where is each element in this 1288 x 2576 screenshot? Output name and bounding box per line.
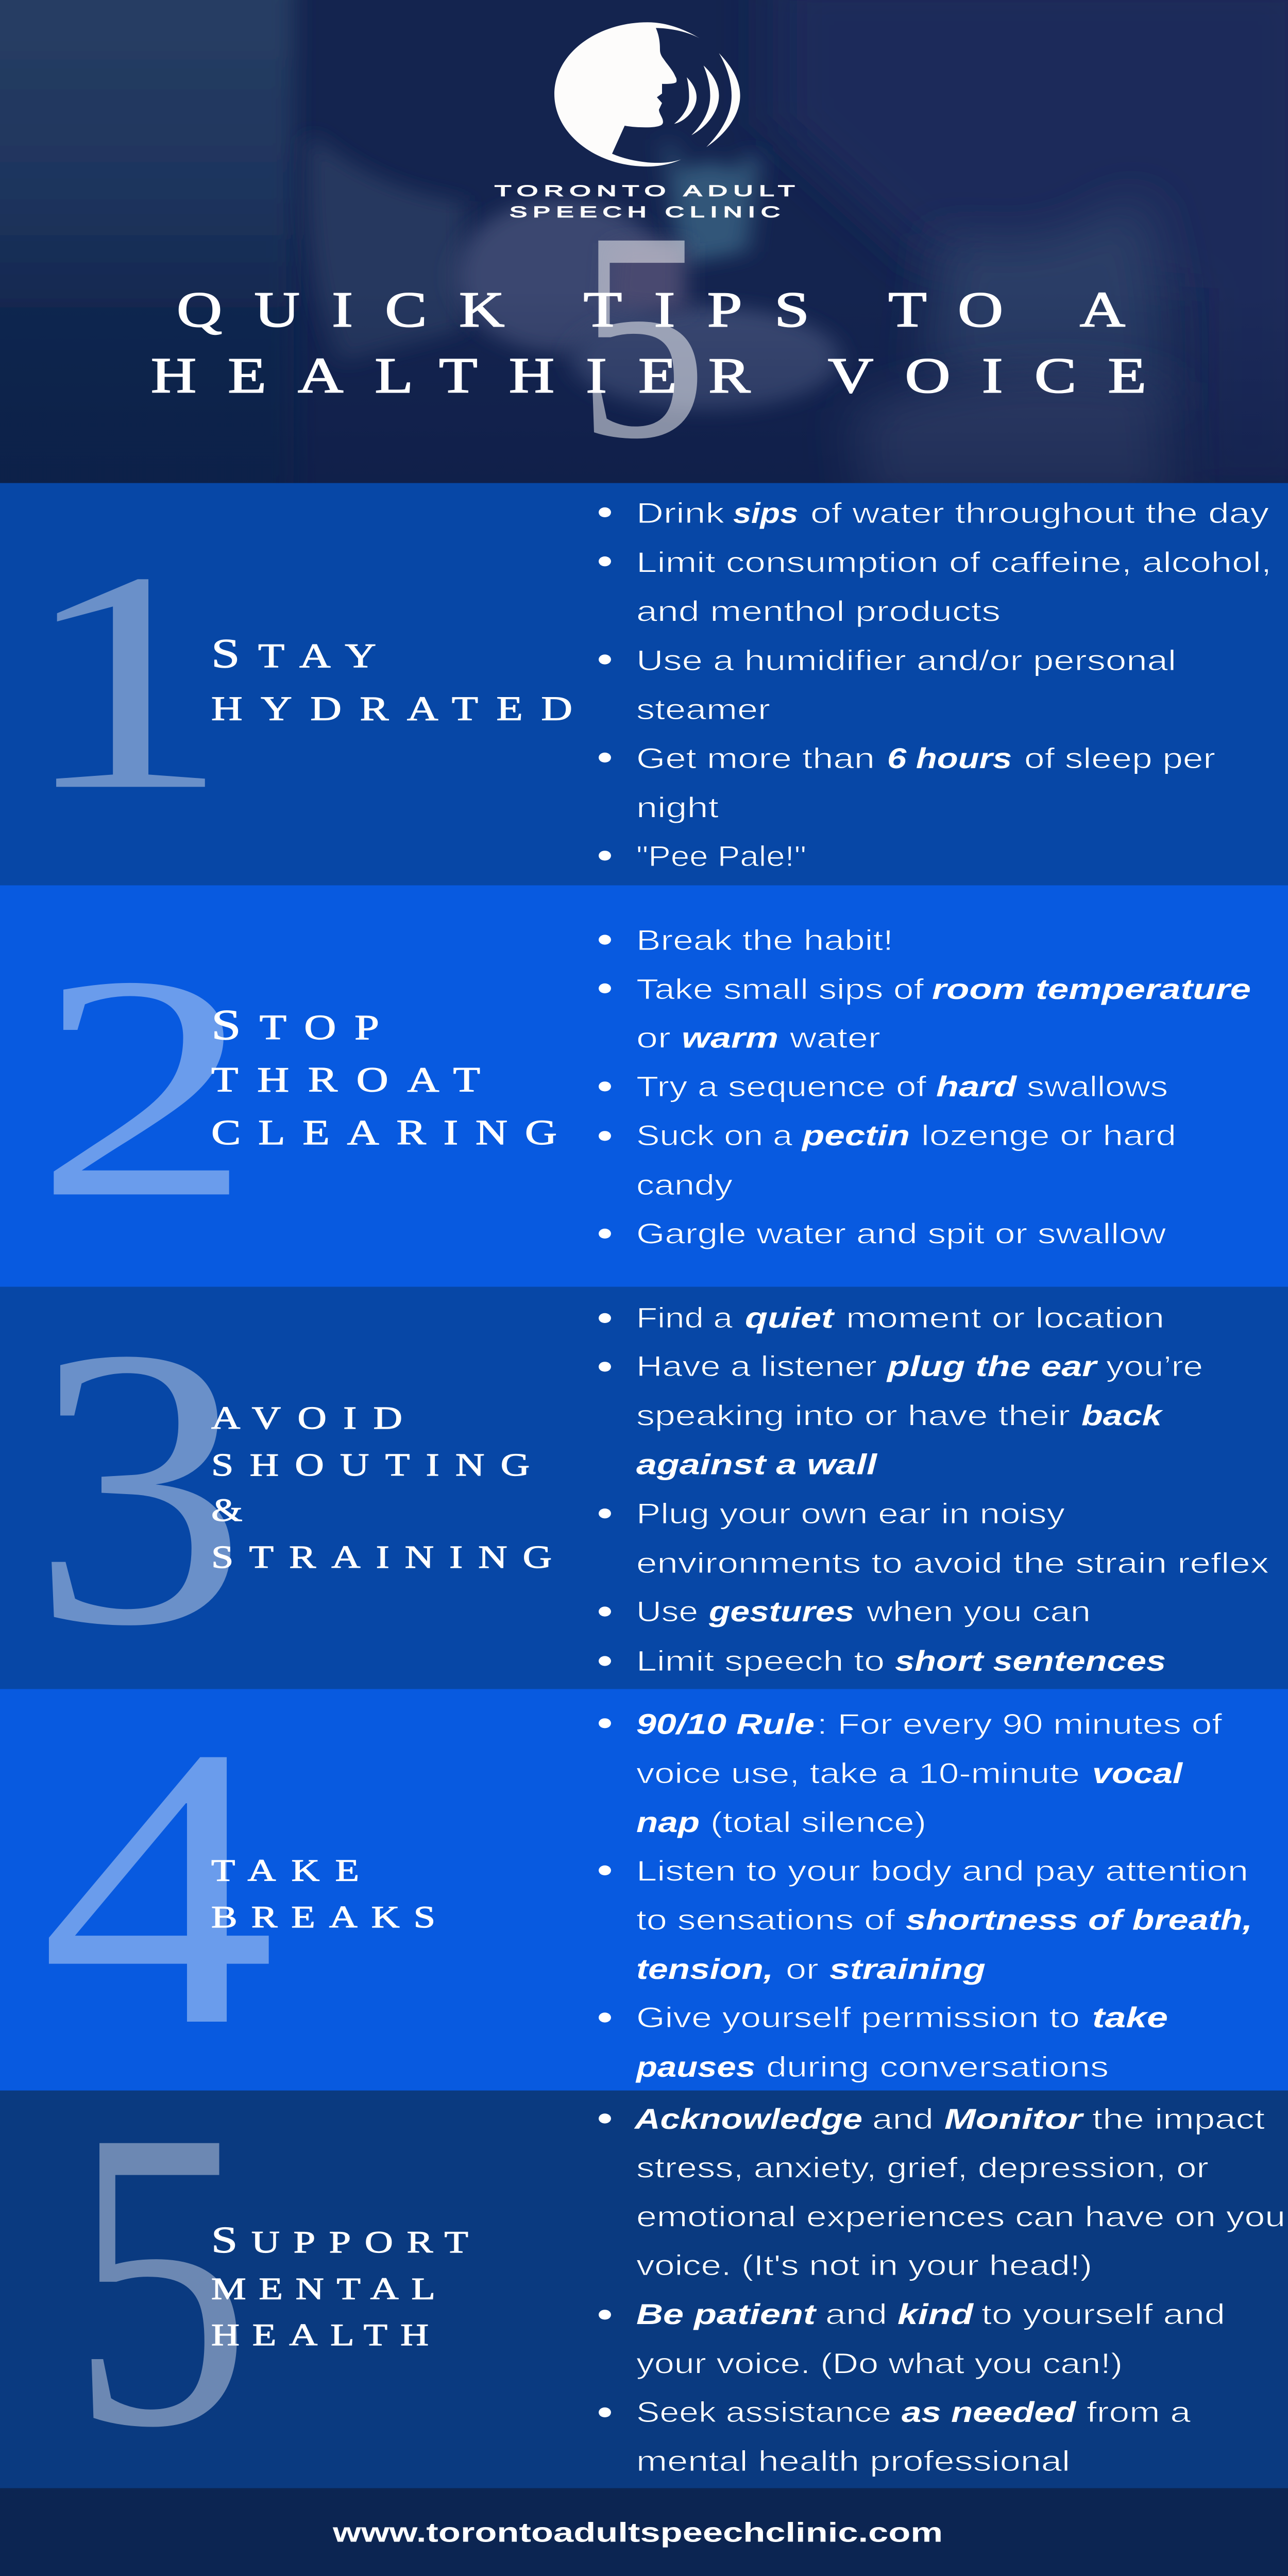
bullet: quiet moment [599,1302,1164,1334]
title: HEALTHIER VOICE [151,348,1146,403]
heading: stay hydrated [211,631,572,728]
footer band [0,2488,1288,2576]
bullet: sleep: night [636,792,719,824]
panel: tip 4 take breaks [0,1664,1288,2109]
bullet: 90/10 rule: vocal [1092,1757,1183,1789]
bullet: gargle: Gargle water and spit or swallow [636,1218,1166,1250]
bullet: listen to your body: tension, [636,1953,773,1985]
bullet: break the habit: Break the habit! [636,925,893,956]
bullet: small sips: water [789,1022,880,1054]
bullet: limit consumption [599,547,1272,628]
bullet: be patient and kind: to yourself and [981,2299,1225,2331]
bullet: pee pale: "Pee Pale!" [636,840,806,872]
bullet: acknowledge and monitor: emotional experiences can have on you [636,2201,1285,2233]
bullet: hard swallows: Try a sequence of [636,1071,927,1103]
heading: stop throat clearing: THROAT [211,1060,480,1099]
panel: tip 5 support mental health [0,2042,1288,2515]
bullet: be patient and kind: Be patient [636,2299,817,2331]
bullet: listen to your body [599,1855,1252,1985]
bullet: be patient and kind [599,2299,1225,2380]
panel: tip 2 stop throat clearing [0,885,1288,1287]
heading: take breaks: TAKE [211,1853,359,1888]
bullet: plug the ear: back [1081,1400,1164,1432]
heading: stay hydrated: HYDRATED [211,689,572,728]
bullet: hard swallows [599,1071,1168,1103]
numeral 3: 3 [31,1265,247,1708]
bullet: permission to pause: pauses [635,2052,755,2083]
bullet: limit consumption: Limit consumption of caffeine, alcohol, [636,547,1272,579]
bullet: seek assistance: as needed [902,2396,1077,2428]
bullet: acknowledge and monitor: the impact [1092,2104,1265,2135]
numeral: header five: 5 [578,171,707,500]
bullet: permission to pause: during conversations [766,2052,1109,2083]
bullet: drink sips: sips [733,498,798,530]
footer website url: www.torontoadultspeechclinic.com [332,2517,943,2548]
bullet: listen to your body: Listen to your body and pay attention [636,1855,1248,1887]
logo wordmark [495,183,801,221]
bullet: small sips: Take small sips of [636,974,924,1006]
bullet: hard swallows: swallows [1027,1071,1168,1103]
bullet: gestures [599,1596,1091,1628]
title: QUICK TIPS TO A [177,282,1125,337]
bullet: plug the ear: against a wall [636,1449,878,1481]
bullet: limit consumption: and menthol products [636,596,1001,628]
heading: avoid shouting and straining [211,1400,552,1575]
bullet: small sips: room temperature [932,974,1251,1006]
bullet: short sentences [599,1646,1166,1677]
bullet: small sips: or [636,1022,671,1054]
bullet: permission to pause: take [1092,2002,1168,2034]
bullet: acknowledge and monitor: and [872,2104,934,2135]
bullet: 90/10 rule: (total silence) [710,1807,926,1838]
heading: support mental health: HEALTH [211,2317,429,2352]
panel: header photo background [0,0,1288,536]
bullet: pectin lozenge: candy [636,1170,733,1201]
heading: support mental health: S UPPORT [211,2219,468,2261]
bullet: plug your own ear: Plug your own ear in noisy [636,1498,1065,1530]
bullet: small sips [599,974,1251,1054]
bullet: gestures: when you can [866,1596,1091,1628]
heading: stay hydrated: S TAY [211,631,376,676]
bullet: acknowledge and monitor: stress, anxiety, grief, depression, or [636,2152,1209,2184]
logo wordmark: SPEECH CLINIC [510,204,786,221]
bullet: listen to your body: straining [829,1953,986,1985]
bullet: gestures: gestures [708,1596,854,1628]
bullet: acknowledge and monitor [599,2104,1285,2281]
bullet: pectin lozenge: pectin [801,1120,910,1152]
heading: support mental health [211,2219,468,2352]
numeral 5: 5 [71,2042,251,2515]
bullet: plug your own ear: environments to avoid the strain reflex [636,1547,1269,1579]
bullet: quiet moment: moment or location [846,1302,1164,1334]
bullet: plug the ear: plug the ear [886,1351,1098,1383]
icon: clinic logo head with sound waves [554,22,740,166]
bullet: sleep: of sleep per [1024,743,1215,775]
bullet: seek assistance: from a [1087,2396,1191,2428]
heading: take breaks [211,1853,435,1934]
bullet: acknowledge and monitor: voice. (It's not in your head!) [636,2250,1092,2281]
heading: avoid shouting and straining: AVOID [211,1400,402,1436]
numeral 1: 1 [19,507,230,855]
panel: tip 3 avoid shouting and straining [0,1265,1288,1708]
bullet: quiet moment: Find a [636,1302,733,1334]
heading: avoid shouting and straining: & [211,1493,243,1528]
bullet: drink sips: Drink [636,498,725,530]
bullet: 90/10 rule [599,1708,1223,1838]
bullet: pectin lozenge: Suck on a [636,1120,792,1152]
bullet: seek assistance [599,2396,1191,2477]
heading: stop throat clearing: CLEARING [211,1113,557,1152]
bullet: listen to your body: to sensations of [636,1904,895,1936]
bullet: plug your own ear [599,1498,1269,1579]
bullet: sleep: 6 hours [887,743,1012,775]
heading: avoid shouting and straining: STRAINING [211,1539,552,1575]
bullet: plug the ear: speaking into or have their [636,1400,1070,1432]
bullet: acknowledge and monitor: Acknowledge [634,2104,862,2135]
bullet: permission to pause [599,2002,1168,2083]
bullet: plug the ear: Have a listener [636,1351,877,1383]
bullet: plug the ear: you’re [1106,1351,1203,1383]
heading: stop throat clearing [211,1001,557,1152]
heading: stop throat clearing: S TOP [211,1001,379,1048]
bullet: drink sips [599,498,1269,530]
numeral 4: 4 [40,1664,276,2109]
title [151,282,1146,403]
heading: take breaks: BREAKS [211,1900,435,1934]
bullet: sleep: Get more than [636,743,875,775]
bullet: sleep [599,743,1215,824]
bullet: 90/10 rule: nap [636,1807,700,1838]
numeral 2: 2 [35,910,253,1264]
bullet: short sentences: Limit speech to [636,1646,885,1677]
bullet: listen to your body: shortness of breath, [906,1904,1252,1936]
bullet: drink sips: of water throughout the day [810,498,1269,530]
bullet: small sips: warm [682,1022,778,1054]
bullet: pectin lozenge: lozenge or hard [921,1120,1176,1152]
bullet: be patient and kind: and [825,2299,887,2331]
bullet: humidifier [599,645,1176,725]
bullet: 90/10 rule: voice use, take a 10-minute [636,1757,1080,1789]
bullet: gestures: Use [636,1596,698,1628]
bullet: listen to your body: or [786,1953,819,1985]
bullet: 90/10 rule: 90/10 Rule [636,1708,815,1740]
bullet: be patient and kind: your voice. (Do what you can!) [636,2348,1123,2380]
bullet: seek assistance: Seek assistance [636,2396,891,2428]
bullet: hard swallows: hard [936,1071,1018,1103]
bullet: acknowledge and monitor: Monitor [944,2104,1084,2135]
bullet: seek assistance: mental health professional [636,2446,1070,2477]
bullet: be patient and kind: kind [897,2299,974,2331]
bullet: 90/10 rule: : For every 90 minutes of [817,1708,1223,1740]
bullet: plug the ear [599,1351,1203,1481]
bullet: permission to pause: Give yourself permission to [636,2002,1080,2034]
bullet: quiet moment: quiet [745,1302,835,1334]
bullet: pectin lozenge [599,1120,1176,1201]
heading: avoid shouting and straining: SHOUTING [211,1447,530,1483]
bullet: humidifier: Use a humidifier and/or personal [636,645,1176,676]
bullet: short sentences: short sentences [895,1646,1166,1677]
heading: support mental health: MENTAL [211,2272,435,2306]
panel: tip 1 stay hydrated [0,483,1288,886]
logo wordmark: TORONTO ADULT [495,183,801,199]
bullet: humidifier: steamer [636,694,770,725]
